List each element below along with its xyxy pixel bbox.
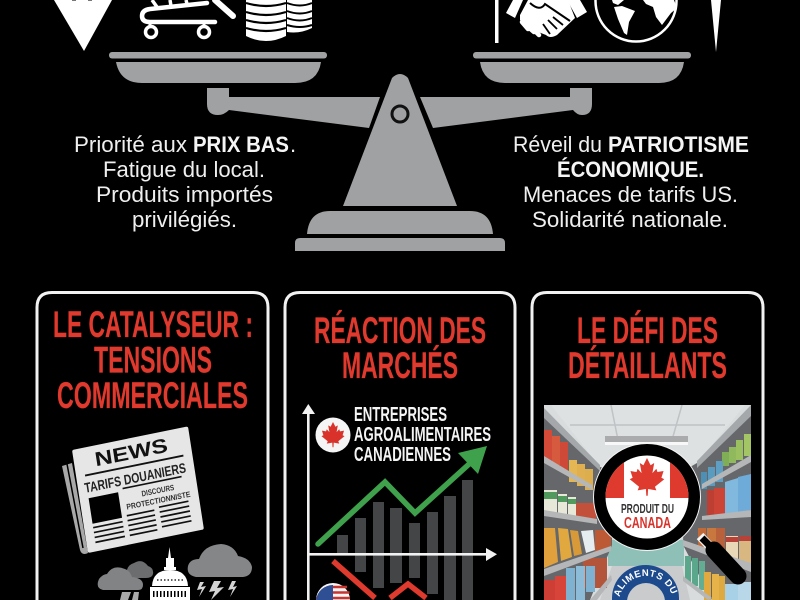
heading: retailers challenge: LE DÉFI DES bbox=[577, 310, 718, 351]
text: left side of balance: . bbox=[290, 132, 296, 157]
text: right side of balance: Menaces de tarifs US. bbox=[523, 182, 738, 207]
text: left side of balance: Priorité aux bbox=[74, 132, 187, 157]
icon: newspaper: NEWS bbox=[93, 435, 169, 471]
back of aisle and floor bbox=[600, 538, 690, 600]
panel: catalyst bbox=[37, 292, 268, 600]
icon: down arrow (low prices) bbox=[54, 0, 112, 51]
heading: retailers challenge bbox=[568, 310, 727, 386]
ceiling bbox=[570, 405, 725, 436]
text: right side of balance: ÉCONOMIQUE. bbox=[557, 157, 704, 182]
illustration: supermarket aisle bbox=[544, 405, 751, 600]
icon: up arrow tip bbox=[711, 0, 721, 52]
label: Canadian agri-food companies: AGROALIMENTAIRES bbox=[354, 424, 491, 446]
icon: storm clouds bbox=[98, 544, 252, 600]
chart axes bbox=[302, 404, 497, 600]
heading: catalyst: LE CATALYSEUR : bbox=[53, 304, 253, 345]
panel: retailers challenge bbox=[530, 291, 764, 600]
right arm bbox=[420, 88, 592, 128]
heading: market reaction: MARCHÉS bbox=[342, 345, 458, 386]
icon: globe bbox=[596, 0, 677, 42]
badge: Aliments du Canada roundel: ALIMENTS DU bbox=[614, 569, 678, 597]
base bbox=[295, 211, 505, 251]
text: right side of balance: PATRIOTISME bbox=[608, 132, 749, 157]
icon: flag pole bbox=[495, 0, 498, 43]
icon: newspaper: PROTECTIONNISTE bbox=[126, 490, 191, 512]
text: right side of balance: Réveil du bbox=[513, 132, 602, 157]
text: right side of balance: Solidarité nationale. bbox=[532, 207, 728, 232]
icon: stacks of coins bbox=[246, 0, 312, 41]
label: Canadian agri-food companies bbox=[354, 404, 491, 466]
icon: magnifying glass bbox=[593, 443, 741, 580]
Canada flag label: PRODUIT DU bbox=[621, 501, 674, 516]
text: left side of balance: Fatigue du local. bbox=[103, 157, 265, 182]
icon: newspaper bbox=[62, 426, 204, 554]
heading: catalyst: COMMERCIALES bbox=[57, 375, 248, 416]
icon: capitol building bbox=[150, 547, 190, 600]
icon: newspaper: DISCOURS bbox=[141, 483, 175, 498]
left shelves bbox=[544, 408, 612, 600]
label: Canadian agri-food companies: CANADIENNES bbox=[354, 444, 451, 466]
left plate and pan bbox=[109, 52, 327, 83]
heading: catalyst bbox=[53, 304, 253, 416]
text: left side of balance: Produits importés bbox=[96, 182, 273, 207]
panel: market reaction bbox=[285, 292, 515, 600]
label: Canadian agri-food companies: ENTREPRISES bbox=[354, 404, 447, 426]
fulcrum bbox=[343, 74, 457, 206]
icon: US flag badge bbox=[316, 583, 350, 600]
heading: market reaction: RÉACTION DES bbox=[314, 310, 486, 351]
icon: shopping cart bbox=[142, 0, 233, 38]
right plate and pan bbox=[473, 52, 691, 83]
heading: catalyst: TENSIONS bbox=[94, 340, 212, 380]
left arm bbox=[207, 88, 380, 128]
scale balance bbox=[109, 52, 691, 251]
heading: market reaction bbox=[314, 310, 486, 386]
line: rising green trend arrow bbox=[318, 446, 487, 544]
text: left side of balance: PRIX BAS bbox=[193, 132, 289, 157]
ceiling lamp bbox=[605, 436, 688, 445]
right shelves bbox=[683, 405, 751, 600]
Canada flag label: CANADA bbox=[624, 515, 671, 532]
icon: newspaper: TARIFS DOUANIERS bbox=[83, 459, 187, 496]
text: left side of balance bbox=[74, 132, 296, 232]
bar chart bbox=[337, 480, 473, 600]
line: falling red trend bbox=[333, 561, 426, 598]
icon: Canadian flag badge bbox=[316, 418, 350, 452]
icon: handshake bbox=[506, 0, 587, 37]
Canada flag label bbox=[605, 455, 689, 539]
text: right side of balance bbox=[513, 132, 749, 232]
text: left side of balance: privilégiés. bbox=[132, 207, 237, 232]
